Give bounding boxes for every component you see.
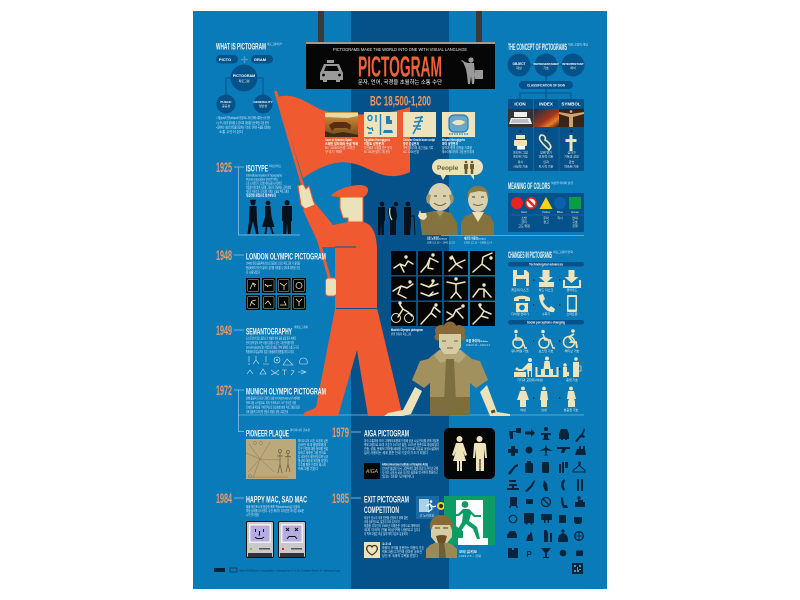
markers (519, 130, 573, 132)
labels: social: 여성 (520, 407, 526, 412)
labels: color meaning (511, 210, 584, 228)
heading: concept (508, 42, 588, 53)
text: pioneer plaque description: 파이오니어 10호 11호에 실린 (298, 438, 328, 443)
diagram: picto plus gram: 일반성 (259, 103, 267, 108)
text: semantography description (246, 336, 299, 354)
heading: munich olympic pictogram: MUNICH OLYMPIC PICTOGRAM (246, 386, 326, 398)
icon: yellow badge (437, 502, 445, 510)
illustration: gerd arntz (461, 186, 494, 235)
captions: neurath and arntz: 1900.12.11 ~ 1988.12.4 (464, 240, 492, 244)
captions: Egyptian Hieroglyphs (364, 138, 390, 142)
labels: 십자가 (567, 150, 576, 154)
pill: social perceptions changing (508, 320, 584, 324)
text: heart note: 마음의 규칙을 표현하는 마음의 기호 (382, 545, 424, 550)
footer: Https://ZOOM.co.kr | Infographics : Sohyang Kim & Yu Jin | Junghee Kwon | Dr. Jaehyung Song (239, 568, 340, 572)
year 1985: 1985 (332, 491, 349, 506)
diagram: semiotic triangle: 기호 (543, 65, 549, 70)
captions: 메소아메리카의 그림 문자 체계 (442, 149, 474, 154)
heading: meaning of colors: MEANING OF COLORS (508, 181, 550, 192)
icon: exit first design: 고 노리오안 (420, 512, 435, 518)
year 1979: 1979 (332, 425, 349, 440)
table: icon index symbol (508, 99, 584, 171)
captions: 거북 껍데기에 새긴 점술 기록 (403, 145, 433, 150)
arrows and labels: technology: 수화기 (542, 311, 550, 316)
text: semantography description: 오스트리아의 찰스 블리스가 개발한 세계 공용 상징 문자 체계로 (246, 336, 296, 340)
labels: social: 중립 기호 (566, 377, 578, 382)
panel: 1979 aiga (332, 425, 495, 479)
captions: Cave of Altamira Spain (325, 138, 352, 142)
captions: 구석기 벽화 (325, 149, 342, 154)
illustration: otl aicher (384, 322, 510, 416)
labels: social: 보스턴 기호 (539, 348, 554, 353)
logo: aiga: AIGA (365, 469, 379, 475)
labels (513, 150, 579, 168)
panel: changes in pictograms (508, 250, 584, 412)
heading: meaning of colors: 색상별 의미와 분류 (551, 181, 573, 185)
icons: blissymbols (247, 356, 307, 375)
labels: color meaning: Green (571, 210, 579, 214)
labels: 약속된 기호 (564, 164, 579, 168)
arrows and labels: technology: 스마트폰 (566, 311, 578, 316)
text: heart note (382, 542, 424, 558)
icons: gender row (517, 340, 576, 407)
text: isotype description: 직접적인 원형으로 평가받는다 (246, 192, 276, 198)
icon: sad mac (278, 522, 306, 558)
labels: color meaning: Yellow (542, 210, 551, 214)
heading: isotype: 아이소타이프 (269, 164, 281, 168)
table: icon index symbol: ICON (514, 102, 526, 106)
text: pioneer plaque description: 지구 인류에 대한 정보를 전달 (298, 446, 328, 451)
caption: otl aicher (466, 338, 490, 347)
panel: munich pictograms grid (391, 251, 495, 336)
heading: what is pictogram: WHAT IS PICTOGRAM (216, 42, 266, 52)
text: munich description: 인체의 움직임을 기하학적으로 단순화한 현대 픽토그램의 표준 (246, 404, 300, 410)
captions: 스페인 알타미라 동굴 벽화 (325, 141, 358, 146)
labels: social: 남성 (541, 407, 547, 412)
speech bubble: people: People (437, 165, 459, 172)
image: pioneer plaque (246, 439, 296, 479)
caption: yukio ota: 1939.2.8 ~ 현재 (459, 554, 481, 558)
qr code (572, 563, 583, 574)
text: pioneer plaque description: 칼 세이건이 제안하였으며 남녀 (298, 454, 328, 459)
caption: otl aicher: 1922.5.13 ~ 1991.9.1 (466, 343, 490, 347)
icons: isotype walking figures (248, 200, 292, 234)
text: isotype description: 복잡한 사회 통계 자료를 그림으로 전달하는 교육 방법 (246, 184, 291, 190)
arrows and labels: technology (511, 279, 578, 316)
text: aiga note (382, 462, 438, 478)
labels: social: 기저귀 교환대 (여성) (517, 377, 543, 382)
upper hand (298, 184, 315, 209)
arrows and labels: technology: 다이얼 전화기 (511, 311, 529, 316)
heading: exit pictogram competition: EXIT PICTOGRAM (364, 494, 409, 506)
captions: 달력과 왕의 업적을 기록한 (442, 145, 472, 150)
captions: neurath and arntz (427, 236, 492, 244)
heading: isotype: ISOTYPE (246, 164, 268, 174)
row 3 icons (508, 461, 585, 475)
text: heart note: 당선 후 국제적 주목을 받았다 (382, 553, 418, 558)
arrows and labels: technology: 하드 디스크 (539, 287, 554, 292)
text: aiga description: 미국 교통부와 미국 그래픽아트협회가 함께 공공 시설 안내를 위해 개발한 (364, 438, 439, 443)
caption: yukio ota (459, 549, 481, 558)
text: munich description: 뮌헨 올림픽 디자인 디렉터 오를 아이허(Otl Aicher)가 제작한 (246, 396, 300, 400)
labels: 프린터 기능 (513, 154, 528, 158)
subtitle: 문자, 언어, 국경을 초월하는 소통 수단 (358, 78, 442, 86)
captions: 이집트 상형문자 (364, 141, 384, 146)
panel: 1948 london (216, 248, 326, 310)
diagram: picto plus gram: 픽토그램 (238, 78, 250, 83)
footer (214, 568, 340, 572)
caption: munich olympic pictogram: 뮌헨 올림픽 픽토그램 (391, 332, 411, 336)
caption: yukio ota: 오타 유키오 (459, 549, 477, 554)
diagram: semiotic triangle: 해석 (570, 65, 576, 70)
heading: bc date: BC 18,500-1,200 (370, 92, 431, 108)
icon: restroom sign (444, 428, 495, 479)
text: pioneer plaque description: 형상과 태양계 위치를 담았다 (298, 458, 328, 463)
text: pioneer plaque description: 픽토그램 기호다 (298, 466, 318, 471)
icon: happy mac (246, 522, 274, 558)
image: egyptian hieroglyphs (364, 112, 397, 137)
labels: color meaning: 주의 (543, 215, 549, 220)
caption: otl aicher: 오를 아이허 Otl Aicher (466, 338, 488, 343)
labels: color meaning: 지시 (557, 215, 563, 220)
icons: isotype bent figures (378, 202, 415, 235)
sign: title board: PICTOGRAM (358, 52, 442, 84)
text: isotype description: International System of Typographic (246, 174, 282, 178)
text: aiga description: 널리 사용되는 세계 표준 안내 기호의 기초가 되었다 (364, 450, 428, 455)
text: exit description: 국제 공모전으로, 일본의 오타 유키오가 (364, 519, 400, 524)
text: london description: 형상화하여 언어가 달라도 경기를 이해할 수 있도록 제작된 기호 (246, 265, 300, 270)
labels: color meaning: Blue (557, 210, 563, 214)
text: semantography description: 활용되며 오늘날까지 많은 사람들에게 영향을 미치고 있다 (246, 349, 294, 354)
labels: 관습 (569, 159, 574, 164)
panel: 1925 isotype (216, 160, 300, 235)
text: pioneer plaque description (298, 438, 328, 471)
heading: changes (508, 250, 573, 261)
text: mac description: 시각 언어 등장 (246, 512, 259, 517)
panel: 1949 semantography (216, 323, 308, 375)
text: pictogram definition: 소통 수단이 된다 (219, 129, 243, 134)
diagram: picto plus gram: PICTO (219, 57, 231, 62)
labels: color meaning: Red (521, 210, 527, 214)
heading: pioneer plaque: PIONEER PLAQUE (246, 428, 289, 440)
text: aiga note: 있는 전문 단체이다 (382, 474, 414, 478)
heading: what is pictogram: 픽토그램이란? (267, 42, 282, 46)
panel: aiga icon grid (507, 427, 586, 574)
labels: 유사 (518, 159, 523, 164)
text: semantography description: Semantography라는 이름으로 발표, 이후 장애인 소통 도구로 (246, 344, 299, 350)
text: london description: 1948년 런던 올림픽에 최초로 등장한 스포츠 픽토그램. 각 종목을 (246, 260, 300, 266)
text: pioneer plaque description: 금속판 외계 생명체에게 (298, 442, 326, 447)
text: mac description: 애플 매킨토시에 등장한 해피 맥(Macintosh)은 컴퓨터 (246, 504, 300, 509)
diagram: picto plus gram (216, 55, 273, 114)
panel: early pictographs bc (325, 92, 475, 154)
flag (276, 91, 410, 280)
face (340, 197, 363, 222)
heading: pioneer plaque: 파이어니어 금속판 (290, 428, 310, 432)
timeline dividers (238, 236, 584, 415)
labels: color meaning: 안내 (572, 215, 578, 220)
text: heart note: 픽토그램 디자인에 참여한 공모전 (382, 549, 422, 554)
heading: concept: 픽토그램의 개념 (568, 42, 588, 46)
text: pictogram definition: • 누구나 쉽게 알아볼 수 있도록 대상을 단순화한 그림 문자 (216, 120, 269, 125)
row 8 icons (508, 548, 583, 559)
text: exit description: 세계 각국의 건물 비상구에 사용되고 있다 (364, 527, 420, 532)
text: mac description (246, 504, 304, 517)
image: crucifix (559, 109, 584, 127)
text: london description (246, 260, 300, 274)
icon: heart face (364, 542, 380, 558)
text: aiga note: 1914년 설립된 미국 그래픽아트 협회 전문 디자이너 단체 (382, 466, 438, 470)
poster background (193, 11, 607, 589)
captions: BC 18,500년경 그려진 (325, 145, 355, 150)
labels: 사실적 기호 (513, 164, 528, 168)
text: pioneer plaque description: 하려고 제작한 그림 언어로 (298, 450, 326, 455)
text: aiga description: 픽토그램으로 50개 기호가 1974년 발표, 1979년 표준으로 확장되었다 (364, 442, 439, 447)
captions: neurath and arntz: 1882.12.10 ~ 1945.12.22 (427, 240, 455, 244)
captions: neurath and arntz: 게르트 아른츠 Gerd Arntz (464, 236, 486, 240)
captions: 마야 상형문자 (442, 141, 458, 146)
image: oracle bone script (403, 112, 436, 137)
captions: Chinese Oracle bone script (403, 138, 436, 142)
labels: social: 성중립 기호 (564, 407, 579, 412)
text: pictogram definition: • 표현하는 대상의 본질을 전달하는 기호로, 언어와 국경을 초월하는 (216, 124, 271, 130)
text: pioneer plaque description: 우주를 향한 인류의 메시지 (298, 462, 326, 467)
icon: cross (566, 135, 576, 151)
beret (331, 185, 368, 197)
image: typewriter (508, 109, 533, 127)
panel: 1984 happy mac (216, 491, 307, 558)
text: isotype description: Picture Education (ISOTYPE) (246, 178, 278, 182)
captions: BC 3000년경의 그림 문자 (364, 149, 390, 154)
heading: semantography: SEMANTOGRAPHY (246, 326, 292, 338)
labels: color meaning: 경고 (543, 219, 549, 224)
heading: london olympic pictogram: LONDON OLYMPIC PICTOGRAM (246, 252, 326, 262)
heading: what is pictogram (216, 42, 282, 52)
heading: semantography (246, 325, 308, 338)
labels: 인과 (543, 159, 549, 164)
sign: title board (306, 42, 495, 89)
text: munich description: 이후 올림픽 디자인의 전범이 되었다 공항, 교통 안내 (246, 409, 288, 414)
text: exit description (364, 515, 420, 536)
pill: technological advances: Technological advances (529, 262, 563, 266)
heading: semantography: 세맨토그래피 (294, 325, 308, 329)
row 2 icons (508, 444, 586, 456)
year 1948: 1948 (216, 248, 232, 263)
panel: meaning of colors (508, 181, 584, 232)
text: pictogram definition: • 그림(picto)과 전보(telegram)의 합성어로, 사회 전체에 소통되는 시각 언어 (216, 115, 270, 120)
pill: technological advances (508, 262, 584, 266)
speech bubble: people (432, 159, 483, 180)
captions: Mayan Hieroglyphs (442, 138, 465, 142)
text: isotype description: 게르트 아른츠가 디자인한 기호는 오늘날 픽토그램의 (246, 188, 289, 194)
text: exit description: 이 픽토그램은 조금 달라지며 지금도 유효하다 (364, 531, 408, 536)
row 4 icons (507, 479, 583, 492)
heading: exit pictogram competition (364, 494, 409, 516)
labels: color meaning: 금지 (521, 219, 527, 224)
image: lava (534, 109, 559, 127)
panel: what is pictogram (216, 42, 282, 134)
labels: 프린터 그림 (513, 150, 528, 154)
text: munich description (246, 396, 300, 414)
icon: taxi (320, 60, 343, 82)
heading: meaning of colors (508, 181, 573, 192)
diagram: semiotic triangle: REPRESENTAMEN (533, 62, 559, 66)
text: semantography description: 언어 장벽 없이 모든 사람이 읽을 수 있는 그림 문자를 지향 (246, 340, 294, 345)
diagram: picto plus gram: PICTOGRAM (233, 74, 255, 78)
text: aiga description: 인종, 성별, 문화적 차이를 배제한 시각 언어로 오늘날 공공시설에서 (364, 446, 439, 451)
labels: 인과적 기호 (539, 154, 554, 158)
image: cave of altamira (325, 112, 358, 137)
text: london description: 로 사용되었다 (246, 270, 260, 274)
captions: 중국 갑골문자 (403, 141, 419, 146)
captions: neurath and arntz: 오토 노이라트 Otto Neurath (427, 236, 447, 240)
panel: 1985 exit (332, 491, 495, 558)
pill: social perceptions changing: Social perceptions changing (527, 320, 565, 324)
logo: aiga (364, 463, 380, 479)
diagram: picto plus gram: PUBLIC (220, 100, 232, 104)
diagram: picto plus gram: GRAM (254, 57, 267, 62)
year 1984: 1984 (216, 491, 232, 506)
panel: concept of pictograms (508, 42, 588, 171)
illustration: yukio ota (426, 515, 457, 558)
row 6 icons (509, 513, 582, 524)
captions: BC 1200년경 (403, 149, 419, 154)
diagram: picto plus gram: 공공성 (222, 103, 230, 108)
heading: concept: THE CONCEPT OF PICTOGRAMS (508, 42, 567, 53)
diagram: semiotic triangle: OBJECT (513, 62, 526, 66)
year 1972: 1972 (216, 383, 232, 398)
diagram: semiotic triangle: 대상 (516, 65, 522, 70)
body and legs (303, 203, 402, 416)
arrows and labels: technology: 플로피 디스크 (511, 287, 529, 292)
captions: 자연물과 사물을 본뜬 문자 (364, 145, 392, 150)
sign tagline: PICTOGRAMS MAKE THE WORLD INTO ONE WITH VISUAL LANGUAGE (333, 47, 467, 52)
icon: hand smoke (540, 135, 551, 150)
labels: social: 유니버설 기호 (511, 348, 529, 353)
captions (325, 138, 474, 154)
table: icon index symbol: INDEX (539, 102, 553, 106)
year 1925: 1925 (216, 160, 232, 175)
figure: flag bearer (298, 184, 402, 416)
labels: color meaning: 고도 위험 (518, 223, 530, 228)
text: aiga note: 디자인 교육과 공공 디자인 표준을 연구하며 활동하고 (382, 470, 438, 474)
text: munich description: 픽토그램 시스템으로, 격자 구조에 45°, 90° 각도만 사용 (246, 400, 296, 405)
icon: printer (514, 135, 527, 150)
labels: color meaning: 구호 (572, 219, 578, 224)
diagram: semiotic triangle: CLASSIFICATION OF SIGN (527, 84, 565, 88)
labels: social: 액티브 기호 (565, 348, 580, 353)
icons: london pictogram grid (246, 278, 306, 310)
text: heart note: 1:2:3 (382, 542, 391, 546)
heading: exit pictogram competition: COMPETITION (364, 505, 399, 516)
row 8 icons: P (526, 550, 532, 559)
year 1949: 1949 (216, 323, 232, 338)
icon: person with suitcase (461, 57, 483, 84)
heading: happy mac sad mac: HAPPY MAC, SAD MAC (246, 494, 307, 506)
diagram: picto plus gram: GENERALITY (253, 100, 273, 104)
row 1 icons (509, 427, 585, 442)
icons: color symbols (511, 197, 581, 209)
labels: 지시적 기호 (539, 164, 554, 168)
text: mac description: 부팅 상태를 나타낸다. 수잔 케어가 디자인한 아이콘 새로운 (246, 508, 304, 513)
lower hand (326, 278, 336, 296)
panel: pioneer plaque (246, 428, 328, 479)
image: mayan hieroglyphs (442, 112, 475, 137)
caption: munich olympic pictogram: Munich Olympic pictogram (391, 328, 423, 332)
labels: 기독교 상징 (564, 154, 579, 158)
row 5 icons (509, 496, 585, 508)
icon: green exit sign (444, 496, 495, 545)
heading: changes: CHANGES IN PICTOGRAMS (508, 250, 552, 261)
diagram: semiotic triangle (508, 54, 584, 99)
panel: 1972 munich (216, 383, 326, 432)
labels: social (511, 348, 580, 412)
diagram: semiotic triangle: INTERPRETANT (562, 62, 584, 66)
icons: technology rows (513, 270, 581, 312)
icons: baby care row (514, 356, 581, 377)
text: exit description: 제출한 디자인이 1985년 국제표준 규격으로 채택되어 (364, 523, 420, 528)
labels: color meaning: 진행 (572, 223, 578, 228)
icons: wheelchair row (513, 334, 577, 348)
row 7 icons (507, 529, 583, 542)
sign hangers (318, 11, 482, 43)
text: aiga description (364, 438, 439, 455)
heading: aiga pictogram: AIGA PICTOGRAM (364, 428, 409, 440)
illustration: otto neurath (418, 183, 458, 235)
icon: exit first design (416, 496, 439, 519)
text: aiga note: AIGA (American Institute of Graphic Arts) (382, 462, 428, 466)
labels: color meaning: 소방 (521, 215, 527, 220)
caption: munich olympic pictogram (391, 328, 423, 336)
text: exit description: 비상구 표시의 국제 표준을 선정하기 위해 열린 (364, 515, 408, 520)
arrows and labels: technology: 클라우드 (566, 287, 578, 292)
labels: 담배 연기 (540, 150, 552, 154)
text: pictogram definition (216, 115, 271, 134)
table: icon index symbol: SYMBOL (561, 102, 581, 106)
text: isotype description: 오토 노이라트가 고안한 세계 공용 시각언어로 (246, 180, 282, 186)
text: isotype description (246, 174, 291, 198)
heading: changes: 픽토그램의 변화 (553, 250, 573, 254)
